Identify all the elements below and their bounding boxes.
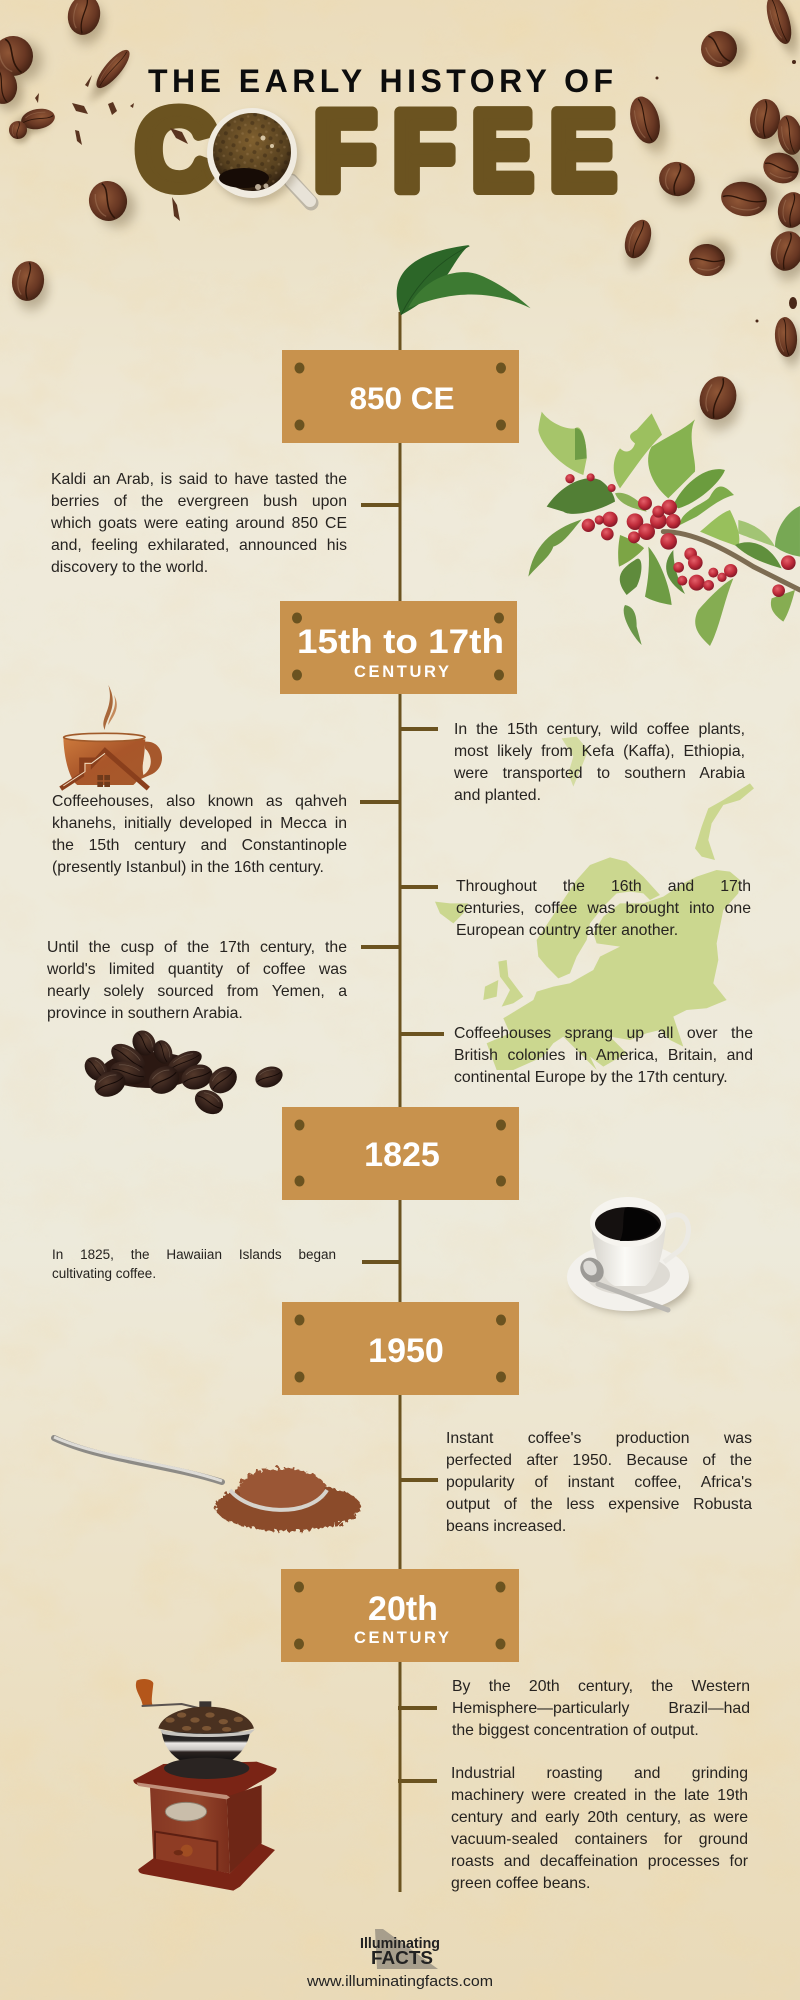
text: instant coffee: output of the less expensive Robusta (446, 1496, 752, 1513)
text: wild coffee plants: and planted. (454, 787, 541, 804)
icon: coffee cup in title (207, 108, 311, 203)
icon: wooden coffee grinder (133, 1679, 277, 1891)
text: Hawaii (52, 1247, 336, 1281)
text: Yemen: nearly solely sourced from Yemen, a (47, 983, 347, 1000)
text: coffeehouses spread: British colonies in America, Britain, and (454, 1047, 753, 1064)
text: qahveh khanehs: Coffeehouses, also known as qahveh (52, 793, 347, 810)
text: wild coffee plants: most likely from Kefa (Kaffa), Ethiopia, (454, 743, 745, 760)
text: Kaldi 850 CE (51, 471, 347, 576)
text: wild coffee plants (454, 721, 746, 804)
text: into Europe: European country after another. (456, 922, 678, 939)
big word COFFEE (136, 87, 616, 213)
text: industrial roasting: green coffee beans. (451, 1875, 590, 1892)
icon: green leaf on top of spine (397, 245, 531, 315)
date plaque: 1950: 1950 (368, 1332, 444, 1370)
title line: THE EARLY HISTORY OF (148, 63, 613, 99)
text: Brazil (452, 1678, 750, 1739)
date plaque: 20th century (281, 1569, 519, 1662)
text: coffeehouses spread (454, 1025, 753, 1086)
icon: coffee beans scattered top right (617, 0, 800, 435)
date plaque: 15th to 17th century (280, 601, 517, 694)
text: industrial roasting (451, 1765, 748, 1892)
logo: Illuminating Facts: Illuminating (360, 1936, 440, 1952)
text: Yemen: Until the cusp of the 17th century, the (47, 939, 347, 956)
connector ticks (360, 503, 444, 1783)
date plaque: 20th century: CENTURY (354, 1629, 449, 1647)
text: industrial roasting: roasts and decaffeination processes for (451, 1853, 748, 1870)
big word COFFEE: C (136, 87, 217, 212)
text: Brazil: the biggest concentration of output. (452, 1722, 699, 1739)
text: Yemen: province in southern Arabia. (47, 1005, 243, 1022)
text: Hawaii: In 1825, the Hawaiian Islands began (52, 1247, 336, 1262)
text: Kaldi 850 CE: Kaldi an Arab, is said to have tasted the (51, 471, 347, 488)
text: qahveh khanehs: (presently Istanbul) in the 16th century. (52, 859, 324, 876)
big word COFFEE: F (314, 89, 376, 213)
text: qahveh khanehs: khanehs, initially developed in Mecca in (52, 815, 347, 832)
date plaque: 15th to 17th century: CENTURY (354, 663, 449, 681)
big word COFFEE: F (393, 89, 455, 213)
text: Yemen (47, 939, 348, 1022)
icon: coffeehouse logo cup with roof (61, 685, 162, 789)
text: instant coffee: perfected after 1950. Because of the (446, 1452, 752, 1469)
text: qahveh khanehs (52, 793, 347, 876)
date plaque: 1825 (282, 1107, 519, 1200)
text: into Europe: centuries, coffee was brought into one (456, 900, 751, 917)
text: Yemen: world's limited quantity of coffee was (47, 961, 347, 978)
text: Brazil: By the 20th century, the Western (452, 1678, 750, 1695)
date plaque: 20th century: 20th (368, 1590, 438, 1628)
icon: coffee beans scattered top left (0, 0, 188, 312)
icon: coffee branch with red berries (528, 412, 800, 646)
text: Kaldi 850 CE: berries of the evergreen bush upon (51, 493, 347, 510)
map of Europe (pale green) (435, 737, 754, 1070)
text: Kaldi 850 CE: discovery to the world. (51, 559, 208, 576)
text: instant coffee (446, 1430, 752, 1535)
text: Brazil: Hemisphere—particularly Brazil—had (452, 1700, 750, 1717)
icon: spoon with ground coffee (54, 1437, 361, 1531)
text: Hawaii: cultivating coffee. (52, 1266, 156, 1281)
text: industrial roasting: century and early 20th century, as were (451, 1809, 748, 1826)
text: into Europe (456, 878, 751, 939)
text: instant coffee: Instant coffee's production was (446, 1430, 752, 1447)
text: coffeehouses spread: Coffeehouses sprang up all over the (454, 1025, 753, 1042)
text: into Europe: Throughout the 16th and 17th (456, 878, 751, 895)
text: wild coffee plants: were transported to southern Arabia (454, 765, 745, 782)
text: instant coffee: beans increased. (446, 1518, 566, 1535)
text: industrial roasting: machinery were created in the late 19th (451, 1787, 748, 1804)
date plaque: 15th to 17th century: 15th to 17th (297, 623, 504, 661)
text: industrial roasting: Industrial roasting and grinding (451, 1765, 748, 1782)
text: Kaldi 850 CE: and, feeling exhilarated, announced his (51, 537, 347, 554)
date plaque: 1950 (282, 1302, 519, 1395)
text: coffeehouses spread: continental Europe by the 17th century. (454, 1069, 728, 1086)
big word COFFEE: E (472, 89, 533, 213)
text: wild coffee plants: In the 15th century, wild coffee plants, (454, 721, 745, 738)
date plaque: 850 CE: 850 CE (349, 380, 455, 416)
date plaque: 850 CE (282, 350, 519, 443)
big word COFFEE: E (550, 89, 616, 213)
date plaque: 1825: 1825 (364, 1136, 440, 1174)
website address: www.illuminatingfacts.com (306, 1973, 493, 1990)
text: instant coffee: popularity of instant coffee, Africa's (446, 1474, 752, 1491)
icon: white cup on saucer with spoon (567, 1197, 690, 1313)
text: industrial roasting: vacuum-sealed containers for ground (451, 1831, 748, 1848)
icon: roasted bean pile (80, 1026, 286, 1119)
logo: Illuminating Facts: FACTS (371, 1947, 433, 1968)
logo: Illuminating Facts (360, 1929, 440, 1969)
timeline spine (398, 312, 402, 1892)
text: Kaldi 850 CE: which goats were eating around 850 CE (51, 515, 347, 532)
text: qahveh khanehs: the 15th century and Constantinople (52, 837, 347, 854)
